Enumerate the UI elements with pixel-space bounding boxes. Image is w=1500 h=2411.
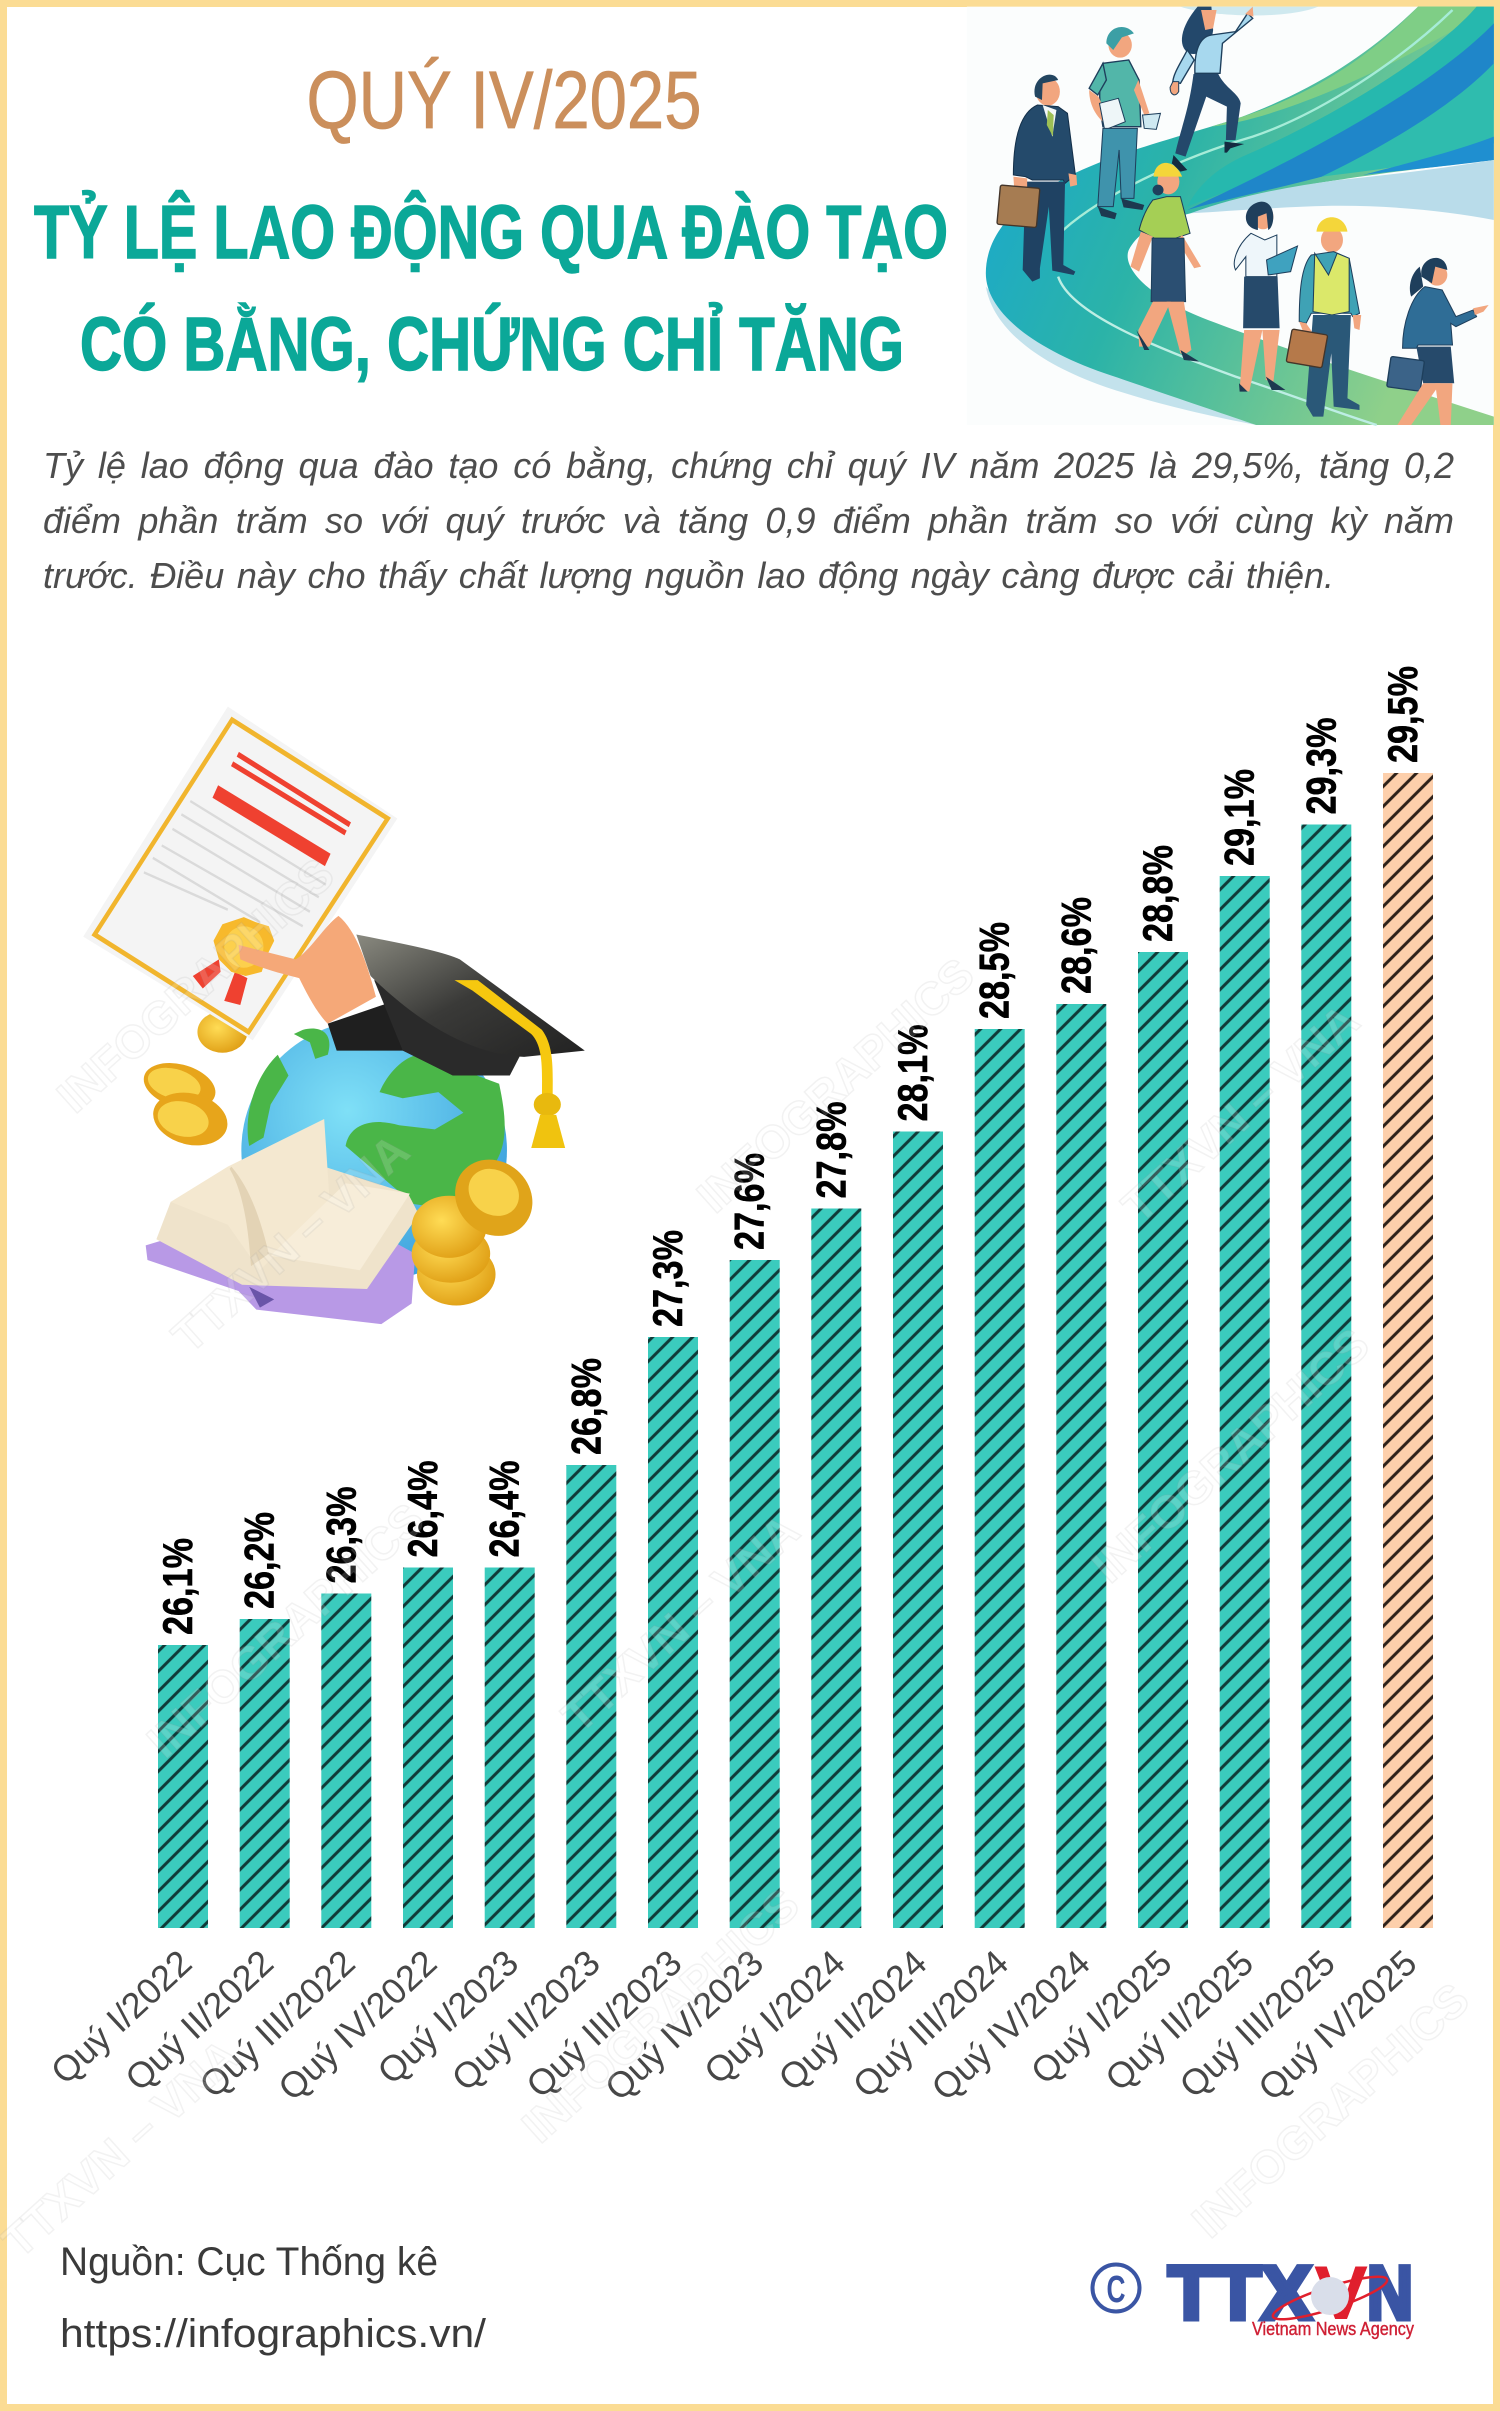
bar: Quý II/2024: 28,1%: [889, 1024, 936, 1122]
bar: Quý I/2023: [481, 1460, 535, 1928]
logo: copyright mark and TTXVN: C: [1106, 2269, 1126, 2311]
bar: Quý III/2024: [971, 922, 1025, 1928]
axis labels: quarters: Quý III/2023: [518, 1942, 689, 2106]
watermark: INFOGRAPHICS: [1082, 1318, 1379, 1592]
bar: Quý III/2023: [644, 1230, 698, 1928]
figure: woman with yellow helmet: [1130, 163, 1201, 362]
axis labels: quarters: [43, 1942, 1424, 2108]
globe: [241, 1020, 507, 1281]
intro paragraph: điểm phần trăm so với quý trước và tăng 0,9 điểm phần trăm so với cùng kỳ năm: [43, 500, 1454, 541]
figure: woman with clipboard: [1234, 202, 1298, 392]
axis labels: quarters: Quý I/2025: [1023, 1942, 1179, 2092]
bar: Quý II/2025: [1216, 769, 1270, 1928]
graduation cap: [356, 935, 585, 1148]
bar chart: trained workers with degrees and certificates by quarter: [154, 666, 1433, 1928]
bar: Quý IV/2024: 28,6%: [1052, 897, 1099, 994]
logo: copyright mark and TTXVN: TTX: [1168, 2251, 1312, 2336]
watermark: TTXVN – VNA: [552, 1504, 809, 1742]
axis labels: quarters: Quý IV/2024: [923, 1942, 1098, 2108]
bar: Quý II/2023: [562, 1358, 616, 1928]
heading line 2: CÓ BẰNG, CHỨNG CHỈ TĂNG: [80, 302, 904, 386]
axis labels: quarters: Quý IV/2023: [597, 1942, 771, 2108]
bar: Quý III/2024: 28,5%: [971, 922, 1018, 1019]
bar: Quý III/2022: 26,3%: [317, 1486, 364, 1584]
figure: worker with yellow vest: [1286, 217, 1361, 417]
bar: Quý I/2025: [1134, 845, 1188, 1928]
open book: [146, 1119, 419, 1324]
axis labels: quarters: Quý II/2023: [444, 1942, 608, 2099]
intro paragraph: [43, 445, 1454, 596]
bar: Quý III/2022: [317, 1486, 371, 1928]
bar: Quý III/2025: [1297, 718, 1351, 1928]
axis labels: quarters: Quý I/2024: [696, 1942, 853, 2092]
bar: Quý I/2022: 26,1%: [154, 1538, 201, 1635]
coins left: [140, 1056, 231, 1152]
bar: Quý III/2025: 29,3%: [1297, 718, 1344, 814]
certificate: [83, 707, 397, 1040]
bar: Quý I/2024: [807, 1102, 861, 1928]
bar: Quý IV/2025 highlighted: 29,5%: [1379, 666, 1426, 763]
bar: Quý IV/2022: [399, 1460, 453, 1928]
axis labels: quarters: Quý III/2025: [1171, 1942, 1343, 2106]
bar: Quý IV/2023: [726, 1153, 780, 1928]
axis labels: quarters: Quý I/2023: [369, 1942, 526, 2092]
bar: Quý II/2024: [889, 1024, 943, 1928]
axis labels: quarters: Quý III/2022: [191, 1942, 363, 2106]
source: Nguồn: Cục Thống kê: [60, 2240, 438, 2284]
watermark: TTXVN – VNA: [162, 1124, 419, 1362]
axis labels: quarters: Quý III/2024: [845, 1942, 1016, 2106]
bar: Quý II/2025: 29,1%: [1216, 769, 1263, 866]
bar: Quý I/2022: [154, 1538, 208, 1928]
bar: Quý II/2022: [236, 1512, 290, 1928]
watermark: TTXVN – VNA: [1112, 994, 1369, 1232]
bar: Quý I/2025: 28,8%: [1134, 845, 1181, 942]
bar: Quý I/2023: 26,4%: [481, 1460, 528, 1558]
figure: woman climbing: [1170, 7, 1253, 172]
coin behind certificate: [197, 1011, 247, 1053]
title: quarter: QUÝ IV/2025: [306, 55, 702, 146]
illustration: workers walking on a career road: [967, 7, 1494, 425]
intro paragraph: trước. Điều này cho thấy chất lượng nguồn lao động ngày càng được cải thiện.: [43, 555, 1334, 596]
illustration: certificate, globe, graduation cap, book and coins: [83, 707, 585, 1324]
bar: Quý I/2024: 27,8%: [807, 1102, 854, 1198]
watermark: [0, 848, 1479, 2267]
axis labels: quarters: Quý I/2022: [43, 1942, 199, 2092]
watermark: INFOGRAPHICS: [137, 1493, 434, 1767]
bar: Quý III/2023: 27,3%: [644, 1230, 691, 1327]
logo: copyright mark and TTXVN: V: [1314, 2251, 1368, 2336]
figure: man in suit with briefcase: [997, 75, 1077, 282]
intro paragraph: Tỷ lệ lao động qua đào tạo có bằng, chứng chỉ quý IV năm 2025 là 29,5%, tăng 0,2: [43, 445, 1454, 486]
road: [986, 287, 1304, 425]
figure: man with cap and tablet: [1089, 27, 1160, 219]
watermark: INFOGRAPHICS: [47, 848, 344, 1122]
watermark: INFOGRAPHICS: [1182, 1973, 1479, 2247]
figure: businesswoman gesturing: [1387, 258, 1489, 425]
hand and sleeve: [239, 916, 412, 1051]
bar: Quý IV/2023: 27,6%: [726, 1153, 773, 1250]
source: [60, 2240, 487, 2356]
logo: copyright mark and TTXVN: [1092, 2251, 1414, 2339]
heading line 1: TỶ LỆ LAO ĐỘNG QUA ĐÀO TẠO: [34, 190, 948, 274]
axis labels: quarters: Quý II/2025: [1097, 1942, 1261, 2099]
axis labels: quarters: Quý II/2022: [117, 1942, 281, 2099]
source: https://infographics.vn/: [60, 2312, 487, 2356]
axis labels: quarters: Quý IV/2025: [1250, 1942, 1424, 2108]
watermark: INFOGRAPHICS: [512, 1878, 809, 2152]
bar: Quý IV/2025 highlighted: [1379, 666, 1433, 1928]
bar: Quý II/2023: 26,8%: [562, 1358, 609, 1455]
bar: Quý II/2022: 26,2%: [236, 1512, 283, 1609]
bar: Quý IV/2022: 26,4%: [399, 1460, 446, 1558]
axis labels: quarters: Quý IV/2022: [270, 1942, 444, 2108]
logo: copyright mark and TTXVN: Vietnam News Agency: [1252, 2319, 1414, 2339]
logo: copyright mark and TTXVN: N: [1367, 2251, 1413, 2336]
axis labels: quarters: Quý II/2024: [770, 1942, 934, 2099]
watermark: INFOGRAPHICS: [687, 948, 984, 1222]
coin stack right: [412, 1148, 541, 1306]
bar: Quý IV/2024: [1052, 897, 1106, 1928]
